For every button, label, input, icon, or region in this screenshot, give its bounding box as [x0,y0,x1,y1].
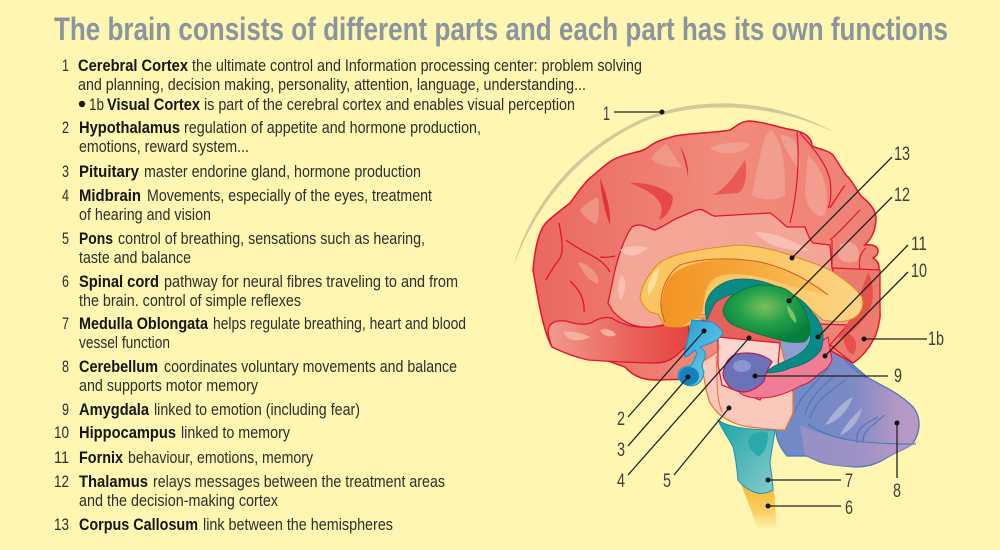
item 8: cerebellum: and supports motor memory [79,376,258,395]
label 5 [663,406,732,492]
label 2: 2 [617,409,625,430]
temporal lobe [548,318,690,363]
hippocampus [740,337,832,398]
cortex folds [546,131,866,312]
item 1: cerebral cortex: and planning, decision making, personality, attention, language, understanding... [78,75,586,94]
item 13: corpus callosum [54,515,393,534]
label 11 [816,234,927,340]
item 8: cerebellum: Cerebellum [79,357,158,376]
item 8: cerebellum: coordinates voluntary movements and balance [164,357,457,376]
item 2: hypothalamus: regulation of appetite and hormone production, [184,118,481,137]
item 10: hippocampus: 10 [54,423,69,442]
item 7: medulla oblongata [62,314,466,352]
temporal highlights [563,329,616,340]
item 4: midbrain: of hearing and vision [79,205,211,224]
cerebrum outline [533,121,880,381]
label 6: 6 [845,498,853,519]
spinal cord [741,484,777,530]
item 12: thalamus: 12 [54,472,69,491]
item 12: thalamus: Thalamus [79,472,148,491]
midbrain area behind [768,335,818,372]
item 11: fornix: behaviour, emotions, memory [128,448,313,467]
item 6: spinal cord: the brain. control of simple reflexes [79,291,301,310]
interior under fornix [705,285,820,365]
item 8: cerebellum: 8 [62,357,69,376]
label 9 [752,366,902,387]
item 3: pituitary: 3 [62,162,69,181]
label 9: 9 [894,366,902,387]
item 9: amygdala: 9 [62,400,69,419]
text block: list of brain parts [54,56,642,534]
item 11: fornix: Fornix [79,448,123,467]
label 12 [786,185,910,304]
item 12: thalamus: and the decision-making cortex [79,491,278,510]
label 10: 10 [911,261,927,282]
item 5: pons: control of breathing, sensations such as hearing, [118,229,425,248]
item 1: cerebral cortex: the ultimate control and Information processing center: problem solving [192,56,642,75]
item 11: fornix [54,448,313,467]
item 7: medulla oblongata: 7 [62,314,69,333]
item 10: hippocampus [54,423,290,442]
label 6 [766,498,853,519]
label 13 [790,144,910,260]
cerebellum [770,345,919,467]
label 3 [617,374,690,461]
item 6: spinal cord [62,272,458,310]
item 2: hypothalamus: Hypothalamus [79,118,180,137]
item 2: hypothalamus: emotions, reward system... [79,137,249,156]
item 1: cerebral cortex: 1b [89,95,104,114]
thalamus [723,285,810,342]
label 8 [893,420,901,502]
label 4: 4 [617,471,625,492]
label 11: 11 [911,234,927,255]
hypothalamus and stalk [678,320,723,386]
pons inner edge [716,356,722,412]
item 5: pons [62,229,425,267]
label 1 [603,104,664,125]
item 3: pituitary: master endorine gland, hormone production [144,162,421,181]
corpus callosum [640,245,863,327]
label 13: 13 [894,144,910,165]
item 6: spinal cord: pathway for neural fibres traveling to and from [164,272,458,291]
item 5: pons: 5 [62,229,69,248]
label 4 [617,336,752,492]
item 7: medulla oblongata: Medulla Oblongata [79,314,208,333]
item 1: cerebral cortex [62,56,642,114]
item 4: midbrain: Midbrain [79,186,141,205]
item 6: spinal cord: Spinal cord [79,272,159,291]
item 7: medulla oblongata: vessel function [79,333,170,352]
arc: cerebral cortex bracket [513,103,835,268]
label 3: 3 [617,440,625,461]
label 1: 1 [603,104,610,125]
item 2: hypothalamus [62,118,481,156]
posterior lobe [830,268,880,363]
posterior lobe detail [838,272,873,355]
item 4: midbrain: Movements, especially of the eyes, treatment [147,186,432,205]
label 5: 5 [663,471,671,492]
midbrain [718,337,780,400]
item 10: hippocampus: linked to memory [181,423,290,442]
item 4: midbrain: 4 [62,186,69,205]
item 1: cerebral cortex: Visual Cortex [107,95,200,114]
item 5: pons: Pons [79,229,113,248]
inner band fold [618,232,810,300]
item 9: amygdala: linked to emotion (including fear) [154,400,360,419]
label 8: 8 [893,481,901,502]
item 13: corpus callosum: Corpus Callosum [79,515,198,534]
item 7: medulla oblongata: helps regulate breathing, heart and blood [213,314,466,333]
item 5: pons: taste and balance [79,248,191,267]
item 1: cerebral cortex: 1 [62,56,69,75]
item 9: amygdala [62,400,360,419]
brain illustration [533,121,919,530]
thalamus highlight [787,305,796,323]
label 7 [766,471,853,492]
amygdala [723,353,772,392]
leader lines and labels [603,104,944,519]
item 1: cerebral cortex: Cerebral Cortex [78,56,188,75]
item 3: pituitary: Pituitary [79,162,139,181]
item 8: cerebellum [62,357,457,395]
pons [702,343,793,430]
item 4: midbrain [62,186,432,224]
item 1: cerebral cortex: is part of the cerebral cortex and enables visual perception [204,95,575,114]
label 1b [862,329,944,350]
item 3: pituitary [62,162,421,181]
inner cortex band [608,210,860,327]
item 10: hippocampus: Hippocampus [79,423,176,442]
amygdala highlight [733,360,751,372]
medulla detail [748,432,768,456]
item 12: thalamus: relays messages between the treatment areas [153,472,445,491]
item 11: fornix: 11 [54,448,69,467]
pituitary [679,367,699,385]
medulla [718,420,775,493]
fornix [705,279,823,373]
item 13: corpus callosum: 13 [54,515,69,534]
label 12: 12 [894,185,910,206]
label 1b: 1b [928,329,944,350]
item 2: hypothalamus: 2 [62,118,69,137]
label 7: 7 [845,471,853,492]
label 10 [822,261,927,358]
item 6: spinal cord: 6 [62,272,69,291]
label 2 [617,328,706,430]
item 13: corpus callosum: link between the hemispheres [203,515,393,534]
item 9: amygdala: Amygdala [79,400,149,419]
item 12: thalamus [54,472,445,510]
